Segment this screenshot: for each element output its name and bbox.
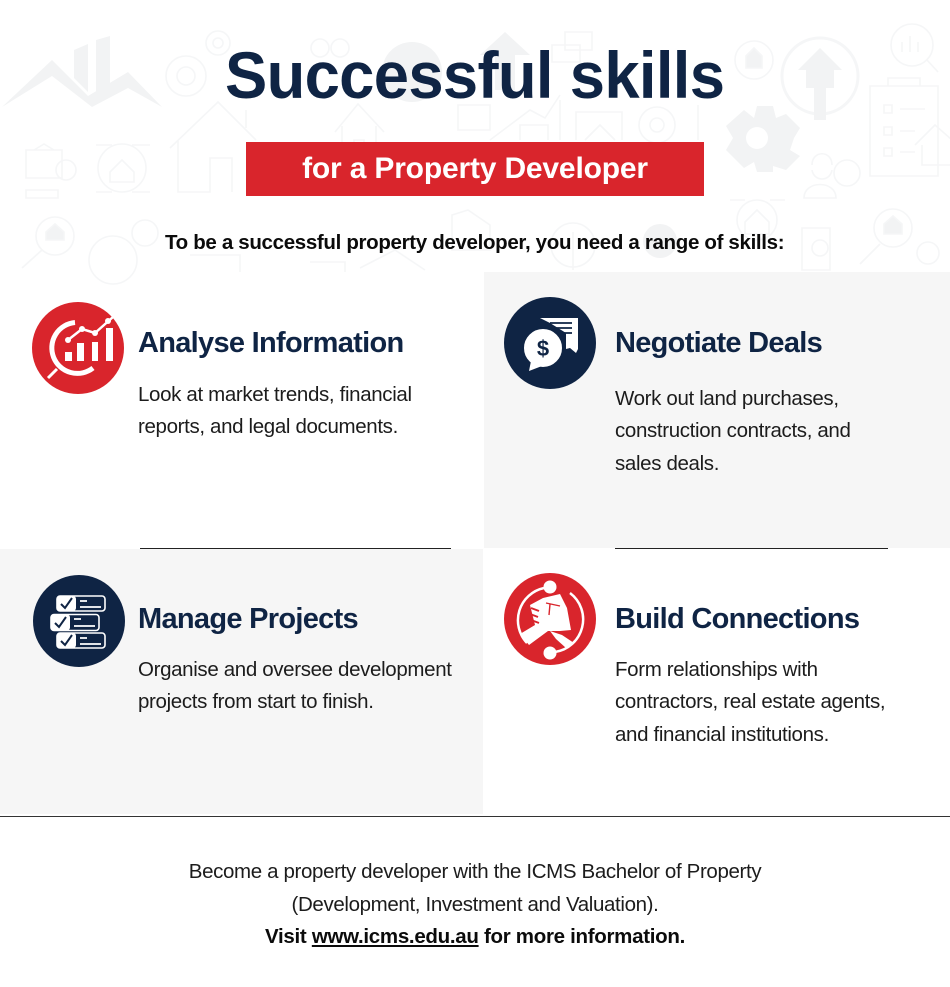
- footer call to action: Visit www.icms.edu.au for more information.: [265, 925, 685, 948]
- intro text: To be a successful property developer, you need a range of skills:: [165, 231, 784, 254]
- footer call to action: [189, 860, 762, 948]
- description: [615, 658, 885, 746]
- description: [138, 382, 412, 438]
- heading: Build Connections: [615, 603, 859, 635]
- heading: Analyse Information: [138, 327, 403, 359]
- icon: handshake: [504, 573, 596, 665]
- panel: analyse information: [32, 302, 412, 438]
- heading: Manage Projects: [138, 603, 358, 635]
- description: Form relationships with: [615, 658, 818, 680]
- title: Successful skills: [225, 38, 724, 112]
- icon: analytics chart: [32, 302, 124, 394]
- panel: manage background: [0, 549, 483, 814]
- divider right: [615, 548, 888, 549]
- icon: speech bubbles with dollar: [504, 297, 596, 389]
- description: contractors, real estate agents,: [615, 690, 885, 713]
- description: sales deals.: [615, 452, 719, 475]
- description: [615, 386, 851, 475]
- description: projects from start to finish.: [138, 690, 374, 713]
- panel: build connections: [504, 573, 885, 746]
- footer call to action: (Development, Investment and Valuation).: [292, 892, 658, 916]
- description: construction contracts, and: [615, 419, 851, 442]
- panel: negotiate deals: [504, 297, 851, 475]
- subtitle banner: [246, 142, 704, 196]
- subtitle banner: for a Property Developer: [302, 152, 648, 185]
- panel: manage projects: [33, 575, 452, 713]
- description: and financial institutions.: [615, 723, 829, 746]
- footer call to action: Become a property developer with the ICMS Bachelor of Property: [189, 860, 761, 883]
- icon: speech bubbles with dollar: $: [537, 336, 549, 361]
- panel: negotiate background: [484, 272, 950, 548]
- description: reports, and legal documents.: [138, 415, 398, 438]
- description: Organise and oversee development: [138, 658, 452, 680]
- background pattern of property icons: [4, 24, 950, 284]
- description: Look at market trends, financial: [138, 382, 412, 406]
- footer rule: [0, 816, 950, 817]
- description: [138, 658, 452, 713]
- divider left: [140, 548, 451, 549]
- icon: checklist: [33, 575, 125, 667]
- heading: Negotiate Deals: [615, 327, 822, 359]
- description: Work out land purchases,: [615, 386, 839, 410]
